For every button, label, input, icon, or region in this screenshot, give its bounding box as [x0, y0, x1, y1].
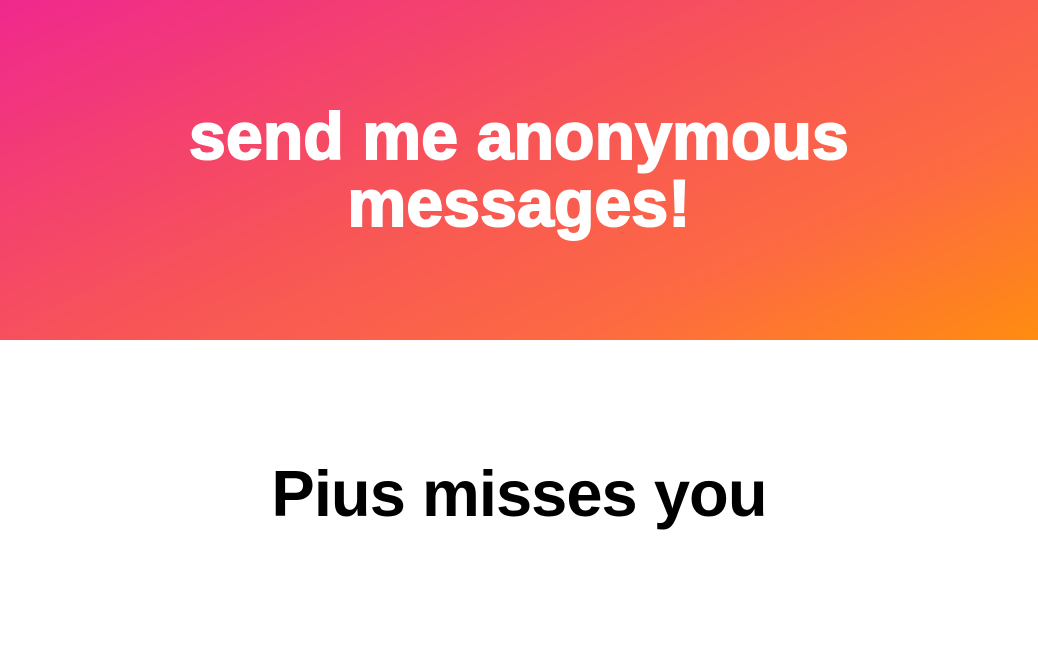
- heading: send me anonymous messages: [189, 99, 849, 241]
- text block: message: Pius misses you: [271, 457, 767, 530]
- heading: send me anonymous messages: messages!: [347, 166, 690, 240]
- panel: gradient header: [0, 0, 1038, 340]
- heading: send me anonymous messages: send me anonymous: [189, 99, 849, 173]
